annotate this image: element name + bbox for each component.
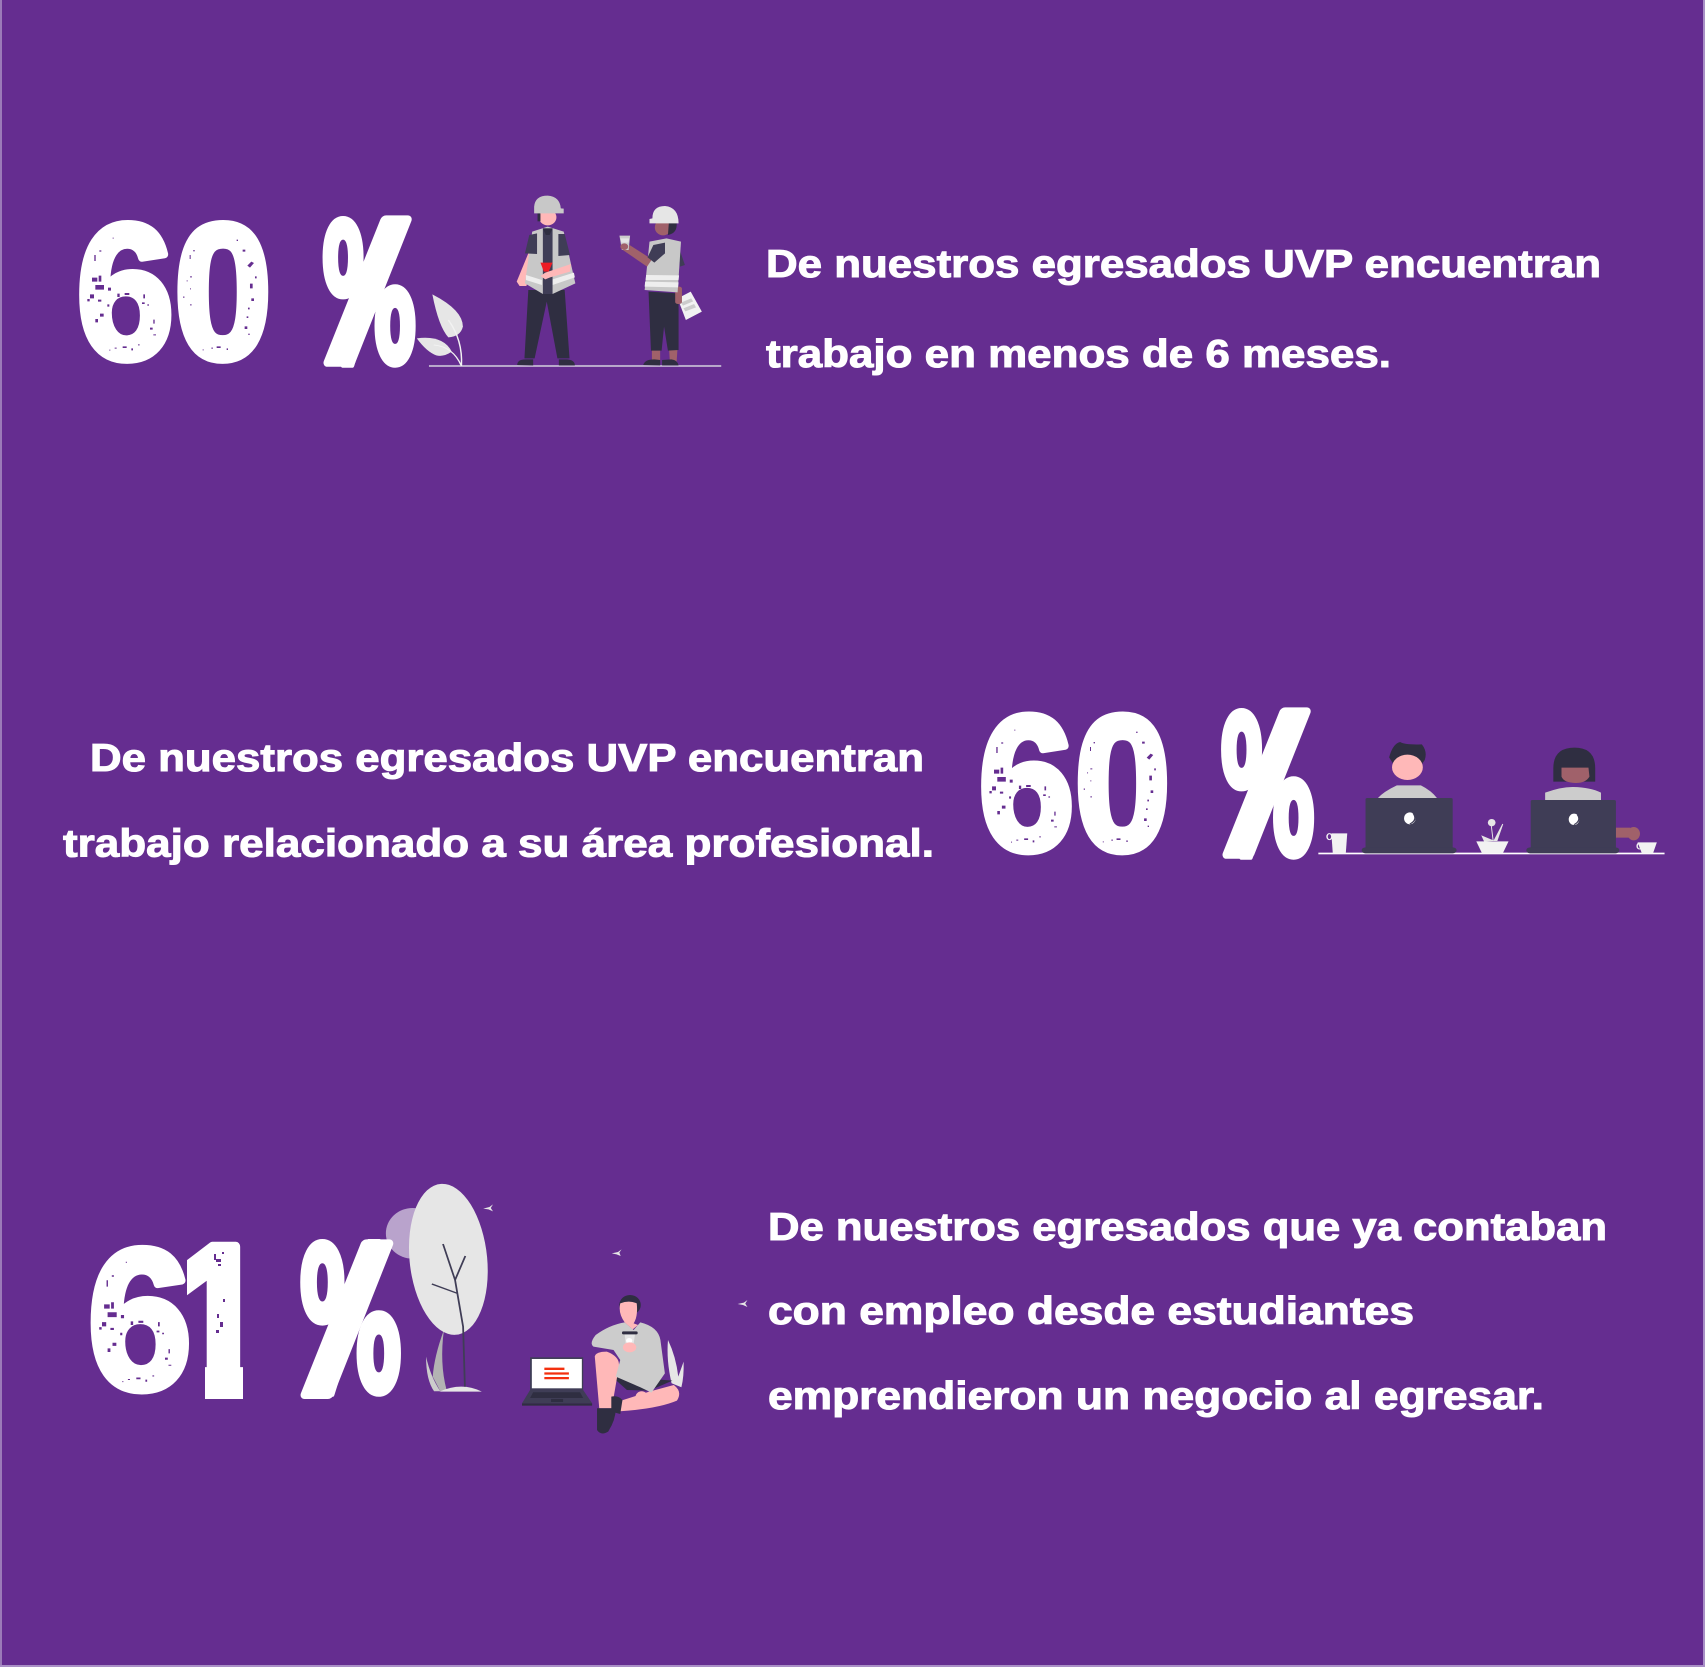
icon: potted plant: [1476, 819, 1509, 853]
big number: 60: 60: [76, 184, 272, 399]
icon: plant behind person: [668, 1340, 684, 1387]
percent sign: /: [1218, 679, 1315, 891]
icon: birds: [483, 1204, 747, 1307]
text: second statement: trabajo relacionado a su área profesional.: [63, 822, 934, 866]
text: second statement: [63, 737, 934, 866]
percent sign: /: [295, 1208, 398, 1433]
big number: 61: 6: [88, 1208, 192, 1432]
icon: worker with red cup: [517, 196, 575, 365]
decorative circle behind tree: [386, 1208, 439, 1259]
text: second statement: De nuestros egresados UVP encuentran: [90, 737, 924, 780]
big number: 61: 1: [168, 1201, 270, 1440]
icon: right cup: [1637, 842, 1657, 853]
icon: person with laptop, right: [1526, 748, 1640, 853]
icon: tree: [403, 1182, 494, 1392]
icon: seated person: [592, 1295, 679, 1433]
icon: worker with papers: [619, 206, 702, 365]
speckle texture on 60: [87, 238, 257, 351]
illustration: two construction workers and leaves: [417, 196, 721, 367]
speckle texture on 61: [99, 1252, 225, 1382]
text: third statement: [768, 1206, 1607, 1418]
icon: person with laptop, left: [1362, 742, 1457, 853]
percent sign: %: [1220, 678, 1315, 899]
text: third statement: emprendieron un negocio al egresar.: [768, 1375, 1544, 1418]
text: third statement: De nuestros egresados que ya contaban: [768, 1206, 1607, 1249]
ground line: [429, 365, 721, 367]
percent sign: /: [319, 187, 416, 399]
panel: 60% find work in under 6 months: [76, 184, 1601, 407]
text: third statement: con empleo desde estudiantes: [768, 1290, 1414, 1333]
big number: 60: 60: [978, 676, 1171, 890]
text: first statement: De nuestros egresados UVP encuentran: [766, 243, 1601, 286]
text: first statement: [766, 243, 1601, 376]
illustration: person with laptop beside a tree: [403, 1182, 747, 1433]
big number: 61: [90, 1242, 243, 1399]
panel: 60% work in their professional area: [63, 676, 1665, 899]
table line: [1318, 853, 1665, 854]
speckle texture on 60: [989, 730, 1156, 843]
percent sign: %: [322, 186, 417, 407]
icon: leaves: [417, 294, 463, 366]
panel: 61% started a business: [88, 1182, 1607, 1440]
percent sign: %: [299, 1208, 402, 1438]
illustration: two people at laptops: [1318, 742, 1665, 854]
text: first statement: trabajo en menos de 6 meses.: [766, 333, 1391, 376]
icon: left cup: [1327, 833, 1347, 853]
icon: open laptop: [522, 1357, 592, 1406]
